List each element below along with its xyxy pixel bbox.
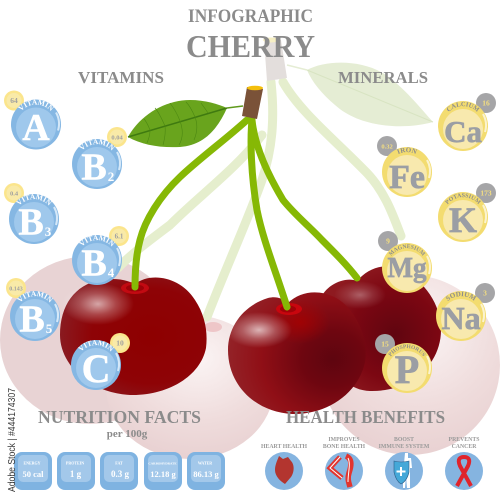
vitamin B3: 0.4 [10, 190, 19, 198]
vitamin B2 [72, 127, 127, 189]
vitamin B4: 6.1 [115, 232, 124, 240]
mineral Ca [438, 93, 496, 151]
mineral Ca: CALCIUM [446, 102, 480, 112]
stems [135, 120, 357, 307]
mineral Na: Na [441, 300, 481, 336]
vitamin B5 [6, 278, 60, 341]
vitamin B2: VITAMIN [78, 139, 116, 150]
mineral Fe: 0.32 [381, 144, 393, 150]
mineral Mg: 9 [386, 236, 390, 246]
mineral Na: 3 [483, 288, 487, 298]
subheading: per 100g: per 100g [107, 428, 148, 440]
mineral Fe [377, 136, 432, 197]
tile: protein: 1 g [70, 469, 82, 479]
benefit: bone health: IMPROVES [328, 437, 360, 443]
pale stems [118, 82, 401, 317]
mineral K: K [449, 200, 477, 240]
vitamin B2: B [81, 146, 107, 188]
title [186, 7, 315, 64]
benefit: immune system: IMMUNE SYSTEM [379, 444, 430, 450]
cherry: center [226, 292, 366, 414]
benefit: prevents cancer: CANCER [452, 444, 477, 450]
mineral Ca: Ca [444, 114, 482, 149]
mineral Ca: 16 [482, 98, 490, 108]
pale cherry: left [0, 256, 180, 424]
tile: carbohydrate [144, 452, 182, 490]
benefit: bone health [323, 437, 366, 490]
tile: water: 86.13 g [193, 469, 220, 479]
vitamin B3: 3 [45, 224, 52, 239]
tile: fat [100, 452, 138, 490]
vitamin B2: 2 [108, 169, 114, 184]
tile: energy: 50 cal [22, 469, 44, 479]
vitamin B2: 0.04 [111, 134, 123, 142]
stem dimple: left [121, 282, 149, 294]
pale leaf [287, 63, 433, 126]
vitamin A: VITAMIN [18, 100, 54, 111]
tile: energy [14, 452, 52, 490]
tile: protein [57, 452, 95, 490]
stem dimple: center [276, 303, 302, 315]
mineral P: PHOSPHORUS [388, 344, 426, 356]
stem cap [242, 86, 263, 119]
mineral P [375, 334, 432, 393]
leaf [128, 100, 243, 147]
vitamin A: A [22, 107, 50, 149]
benefit: immune system [379, 437, 430, 490]
tile: fat: 0.3 g [111, 469, 130, 479]
vitamin B3 [4, 183, 59, 244]
tile: protein: PROTEIN [66, 460, 84, 466]
tile: carbohydrate: CARBOHYDRATE [148, 462, 177, 466]
vitamin B5: VITAMIN [16, 291, 54, 302]
mineral Fe: IRON [396, 148, 418, 154]
title: CHERRY [186, 28, 315, 64]
tile: water: WATER [198, 460, 212, 466]
mineral P: 15 [381, 340, 389, 348]
vitamin B5: B [19, 298, 45, 340]
vitamin B4: VITAMIN [78, 235, 116, 246]
pale cherry: middle [106, 315, 274, 459]
heading: minerals: MINERALS [338, 68, 428, 87]
mineral K: 173 [480, 188, 492, 198]
pale cherry: right [320, 275, 500, 455]
vitamin B4 [72, 226, 129, 285]
tile: water [187, 452, 225, 490]
vitamin B4: B [81, 242, 107, 284]
tile: carbohydrate: 12.18 g [150, 469, 176, 479]
stock credit: Adobe Stock | #444174307 [6, 388, 18, 492]
vitamin C: VITAMIN [78, 340, 114, 352]
vitamin C: C [82, 346, 110, 391]
vitamin C: 10 [116, 338, 124, 348]
vitamin A [4, 90, 61, 150]
benefit: heart health: HEART HEALTH [261, 444, 308, 450]
tile: fat: FAT [115, 460, 123, 466]
vitamin B5: 5 [46, 321, 53, 336]
pale stem dimple [204, 322, 222, 332]
vitamin A: 64 [10, 96, 18, 105]
vitamin B3: B [18, 202, 44, 244]
mineral Na: SODIUM [446, 292, 476, 301]
mineral Na [436, 283, 495, 341]
benefit: heart health [261, 444, 308, 490]
mineral Mg: Mg [388, 253, 426, 284]
vitamin B4: 4 [108, 265, 115, 280]
mineral K [438, 183, 496, 242]
mineral Mg [378, 231, 432, 293]
vitamin B3: VITAMIN [16, 194, 52, 206]
mineral K: POTASSIUM [444, 193, 482, 204]
heading: health benefits: HEALTH BENEFITS [286, 407, 445, 427]
cherry: right [319, 266, 441, 391]
vitamin B5: 0.143 [9, 286, 23, 292]
heading: nutrition facts: NUTRITION FACTS [38, 407, 201, 427]
pale stem cap [263, 38, 287, 81]
cherry: left [60, 277, 207, 395]
title: INFOGRAPHIC [188, 7, 313, 27]
benefit: prevents cancer [445, 437, 483, 490]
tile: energy: ENERGY [23, 460, 41, 466]
mineral Fe: Fe [389, 159, 425, 196]
vitamin C [71, 333, 130, 391]
benefit: immune system: BOOST [394, 437, 414, 443]
mineral Mg: MAGNESIUM [388, 244, 426, 256]
heading: vitamins: VITAMINS [78, 68, 164, 87]
benefit: bone health: BONE HEALTH [323, 444, 366, 450]
benefit: prevents cancer: PREVENTS [449, 437, 479, 443]
mineral P: P [395, 347, 419, 392]
